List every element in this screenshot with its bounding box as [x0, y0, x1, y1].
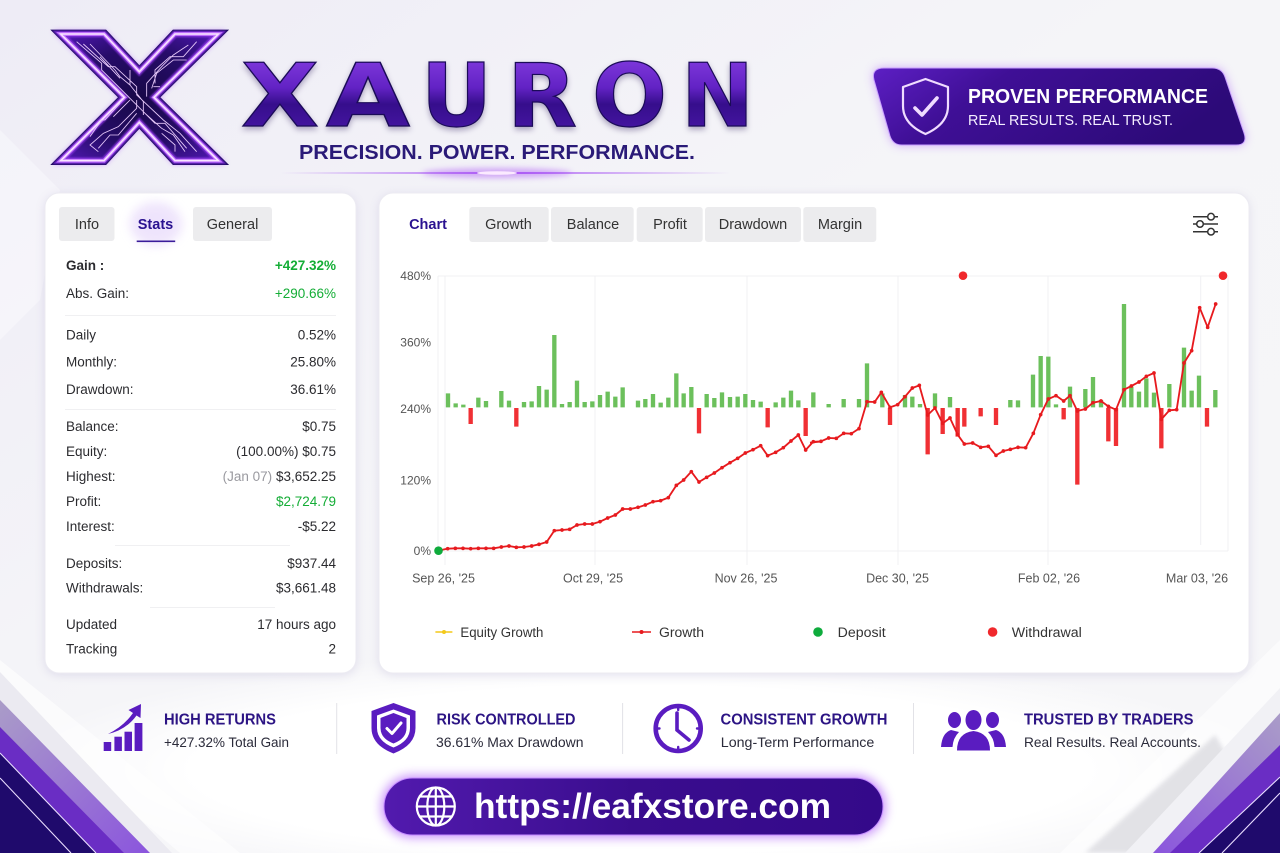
feature: trusted by traders: Real Results. Real Accounts.	[1024, 734, 1201, 750]
tracking rows: Updated	[66, 617, 117, 632]
y axis labels: 240%	[400, 402, 431, 416]
balance rows: Interest:	[66, 519, 115, 534]
logo wordmark: XAURON: O	[592, 45, 667, 147]
feature: risk controlled: 36.61% Max Drawdown	[436, 734, 584, 750]
balance rows: (100.00%) $0.75	[236, 444, 336, 459]
gain rows: Abs. Gain:	[66, 286, 129, 301]
feature: risk controlled: RISK CONTROLLED	[436, 712, 576, 728]
website url pill: https://eafxstore.com	[474, 787, 831, 826]
balance rows	[66, 419, 336, 534]
stats tabs: Stats	[138, 217, 173, 233]
transfer rows: Deposits:	[66, 556, 122, 571]
chart tabs: Drawdown	[719, 217, 787, 233]
x axis labels: Nov 26, '25	[715, 572, 777, 586]
deposit and withdrawal markers	[434, 271, 1227, 555]
icon: shield check	[372, 703, 416, 754]
chart legend	[435, 625, 1082, 640]
corner decoration: bottom left	[0, 672, 172, 853]
balance rows: Highest:	[66, 469, 116, 484]
balance rows: Profit:	[66, 494, 101, 509]
chart grid	[438, 276, 1228, 565]
chart tabs: Margin	[818, 217, 862, 233]
badge heading: PROVEN PERFORMANCE	[968, 86, 1208, 108]
balance rows: $0.75	[302, 419, 336, 434]
tagline: PRECISION. POWER. PERFORMANCE.	[299, 142, 695, 164]
feature: consistent growth: Long-Term Performance	[721, 734, 875, 750]
balance rows: Balance:	[66, 419, 119, 434]
logo wordmark: XAURON: A	[326, 45, 410, 147]
rate rows: 25.80%	[290, 355, 336, 370]
rate rows: Monthly:	[66, 355, 117, 370]
feature: high returns: HIGH RETURNS	[164, 712, 276, 728]
chart tabs: Balance	[567, 217, 619, 233]
y axis labels	[400, 269, 431, 558]
gain rows: Gain :	[66, 258, 104, 273]
daily profit bars	[448, 304, 1215, 485]
stats tabs: General	[207, 217, 258, 233]
x axis labels: Oct 29, '25	[563, 572, 623, 586]
balance rows: (Jan 07) $3,652.25	[223, 469, 336, 484]
rate rows: Daily	[66, 328, 96, 342]
x axis labels	[412, 572, 1228, 586]
panel: growth chart	[379, 193, 1249, 675]
feature: risk controlled	[372, 703, 584, 754]
tracking rows	[66, 617, 336, 656]
icon: globe	[417, 788, 455, 826]
rate rows	[66, 328, 336, 397]
tracking rows: Tracking	[66, 642, 117, 656]
x axis labels: Dec 30, '25	[866, 572, 929, 586]
feature: consistent growth	[656, 706, 888, 751]
y axis labels: 480%	[400, 269, 431, 283]
logo wordmark: XAURON	[241, 45, 754, 147]
stats tabs	[59, 202, 272, 246]
transfer rows: $937.44	[287, 556, 336, 571]
y axis labels: 360%	[400, 336, 431, 350]
icon: three people	[941, 710, 1006, 750]
tagline glow divider	[280, 168, 730, 178]
chart legend: Deposit	[838, 625, 886, 640]
chart tabs: Chart	[409, 217, 447, 233]
feature: trusted by traders: TRUSTED BY TRADERS	[1024, 712, 1194, 728]
feature: consistent growth: CONSISTENT GROWTH	[720, 712, 888, 728]
logo: X emblem with circuit traces	[53, 31, 227, 164]
logo wordmark: XAURON: X	[241, 45, 319, 147]
gain rows: +427.32%	[275, 258, 336, 273]
chart legend: Withdrawal	[1012, 625, 1082, 640]
x axis labels: Feb 02, '26	[1018, 572, 1080, 586]
chart legend: Growth	[659, 625, 704, 640]
tracking rows: 2	[328, 642, 336, 656]
icon: clock	[656, 706, 701, 751]
rate rows: Drawdown:	[66, 382, 134, 397]
website url pill	[381, 775, 886, 838]
feature: high returns: +427.32% Total Gain	[164, 734, 289, 750]
logo wordmark: XAURON: N	[681, 45, 754, 147]
transfer rows: $3,661.48	[276, 580, 336, 596]
icon: rising bar chart with arrow	[104, 704, 142, 751]
chart legend: Equity Growth	[460, 625, 543, 640]
growth line	[438, 302, 1217, 551]
transfer rows	[66, 556, 336, 596]
balance rows: -$5.22	[298, 519, 336, 534]
y axis labels: 120%	[400, 474, 431, 488]
icon: shield check	[903, 79, 948, 134]
x axis labels: Mar 03, '26	[1166, 572, 1228, 586]
rate rows: 36.61%	[290, 382, 336, 397]
corner decoration: bottom right	[1085, 688, 1280, 853]
badge: proven performance	[873, 68, 1245, 145]
feature: trusted by traders	[941, 710, 1201, 750]
rate rows: 0.52%	[298, 328, 336, 342]
gain rows	[66, 258, 336, 301]
icon: settings sliders	[1193, 213, 1218, 235]
chart tabs: Profit	[653, 217, 687, 233]
chart tabs	[409, 207, 876, 242]
x axis labels: Sep 26, '25	[412, 572, 475, 586]
logo wordmark: XAURON: U	[421, 45, 492, 147]
transfer rows: Withdrawals:	[66, 580, 143, 596]
balance rows: $2,724.79	[276, 494, 336, 509]
badge subheading: REAL RESULTS. REAL TRUST.	[968, 113, 1173, 129]
chart tabs: Growth	[485, 217, 532, 233]
tracking rows: 17 hours ago	[257, 617, 336, 632]
panel: account stats	[45, 193, 356, 675]
feature: high returns	[104, 704, 289, 751]
gain rows: +290.66%	[275, 286, 336, 301]
logo wordmark: XAURON: R	[507, 45, 577, 147]
balance rows: Equity:	[66, 444, 107, 459]
stats tabs: Info	[75, 217, 99, 233]
y axis labels: 0%	[414, 544, 431, 558]
